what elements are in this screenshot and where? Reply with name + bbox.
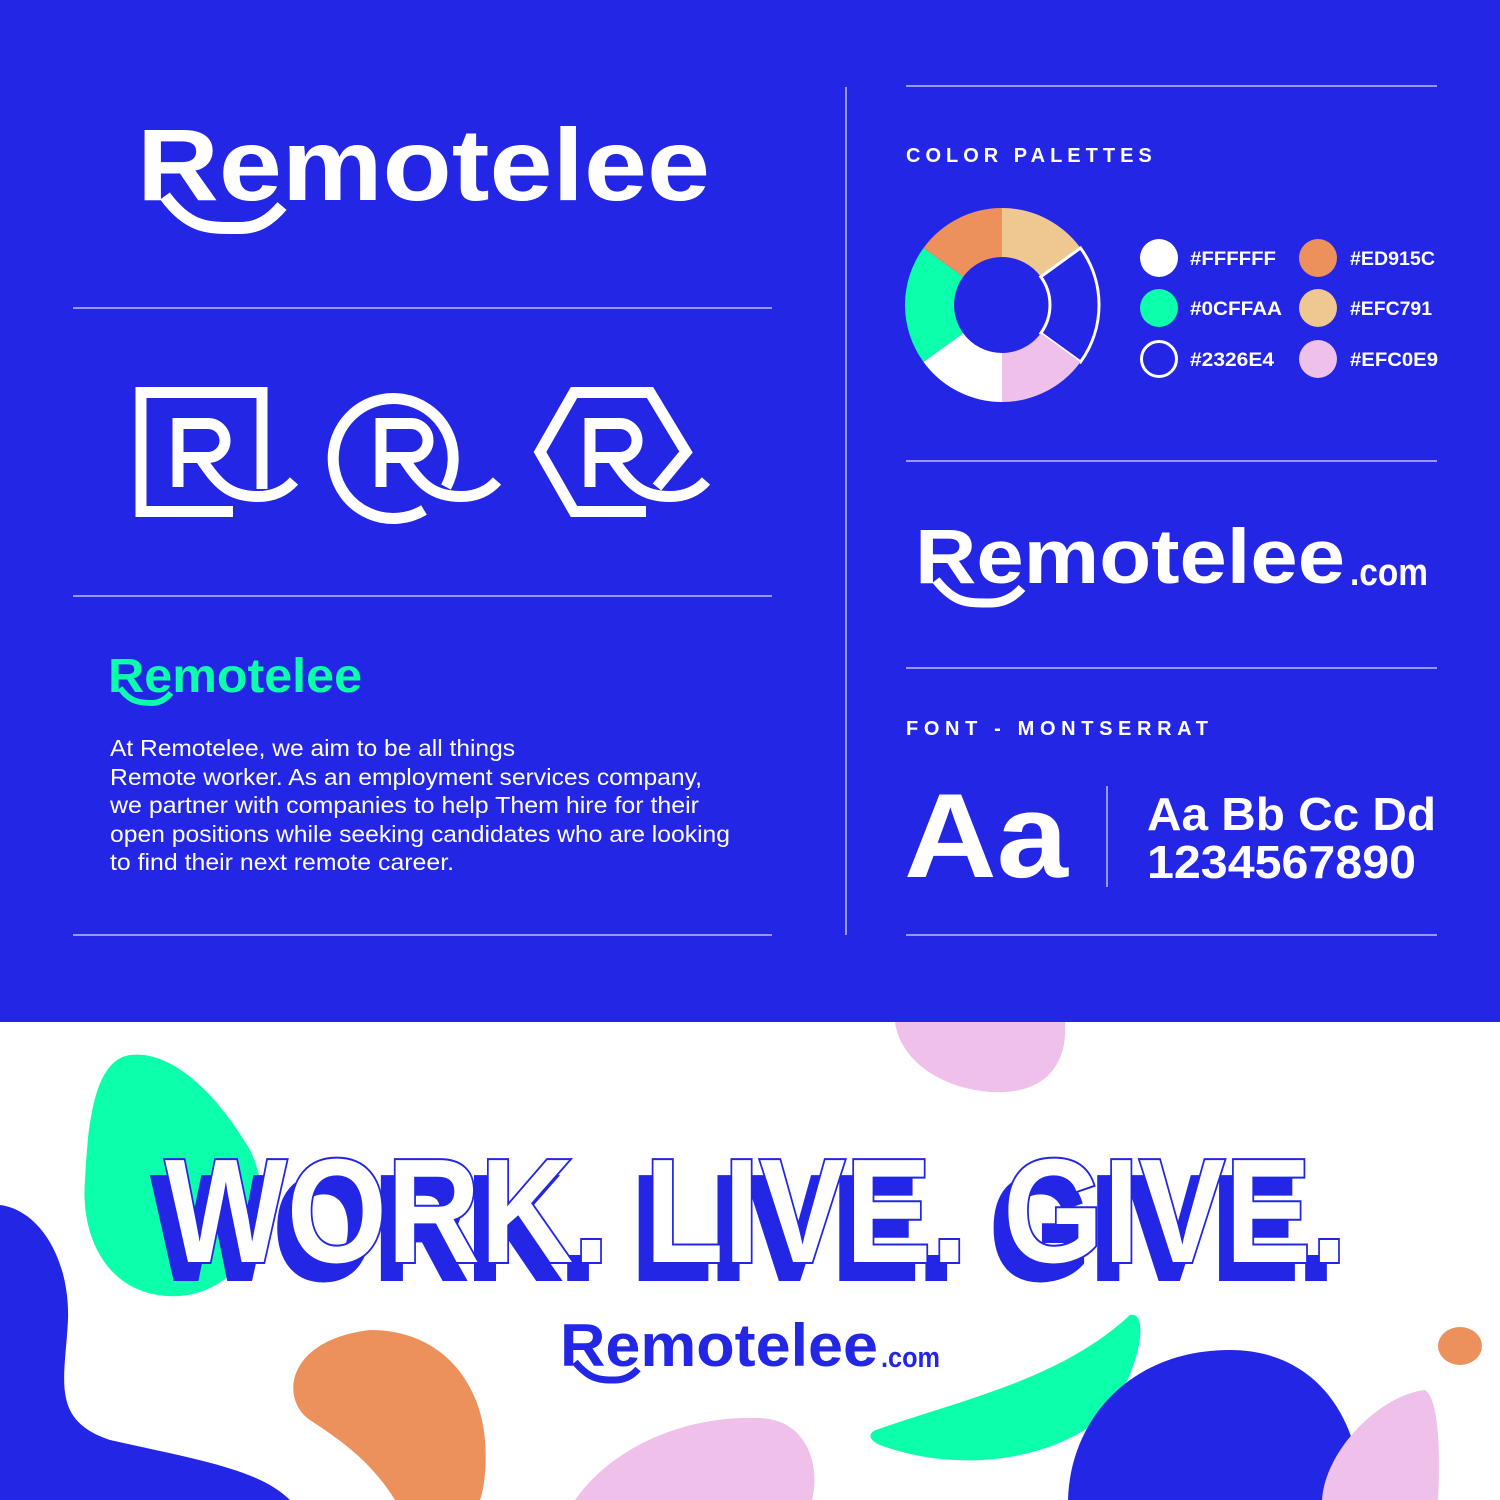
- legend: #EFC0E9: [1350, 350, 1438, 371]
- legend: #FFFFFF: [1190, 249, 1276, 270]
- description text: Remote worker. As an employment services company,: [110, 764, 702, 790]
- legend: #0CFFAA: [1190, 299, 1282, 320]
- icon: circle R: [333, 399, 497, 519]
- font sample: 1234567890: [1147, 836, 1416, 888]
- heading: color palettes: COLOR PALETTES: [906, 145, 1157, 167]
- description text: [109, 735, 730, 875]
- description text: open positions while seeking candidates who are looking: [110, 821, 730, 847]
- legend: #2326E4: [1190, 350, 1274, 371]
- heading: font: FONT - MONTSERRAT: [906, 718, 1213, 740]
- description text: to find their next remote career.: [110, 849, 454, 875]
- font sample: Aa Bb Cc Dd: [1147, 788, 1436, 840]
- main logo: Remotelee: [137, 108, 710, 222]
- icon: hexagon R: [540, 392, 706, 512]
- font sample: [904, 769, 1436, 903]
- logo .com: Remotelee: [915, 514, 1345, 600]
- icon: square R: [141, 392, 294, 512]
- headline: WORK. LIVE. GIVE.: [152, 1146, 1334, 1311]
- green logo: Remotelee: [108, 650, 362, 703]
- logo icons: [141, 392, 706, 519]
- bottom logo: .com: [881, 1342, 940, 1374]
- legend: #EFC791: [1350, 299, 1432, 320]
- logo .com: .com: [1350, 552, 1428, 594]
- headline: WORK. LIVE. GIVE.: [165, 1129, 1347, 1294]
- description text: we partner with companies to help Them hire for their: [109, 792, 699, 818]
- description text: At Remotelee, we aim to be all things: [110, 735, 515, 761]
- legend: #ED915C: [1350, 249, 1435, 270]
- bottom logo: Remotelee: [560, 1312, 878, 1379]
- donut chart: [905, 208, 1099, 402]
- font sample: Aa: [904, 769, 1069, 903]
- decorative blobs: [0, 1022, 1482, 1500]
- legend: [1140, 239, 1438, 378]
